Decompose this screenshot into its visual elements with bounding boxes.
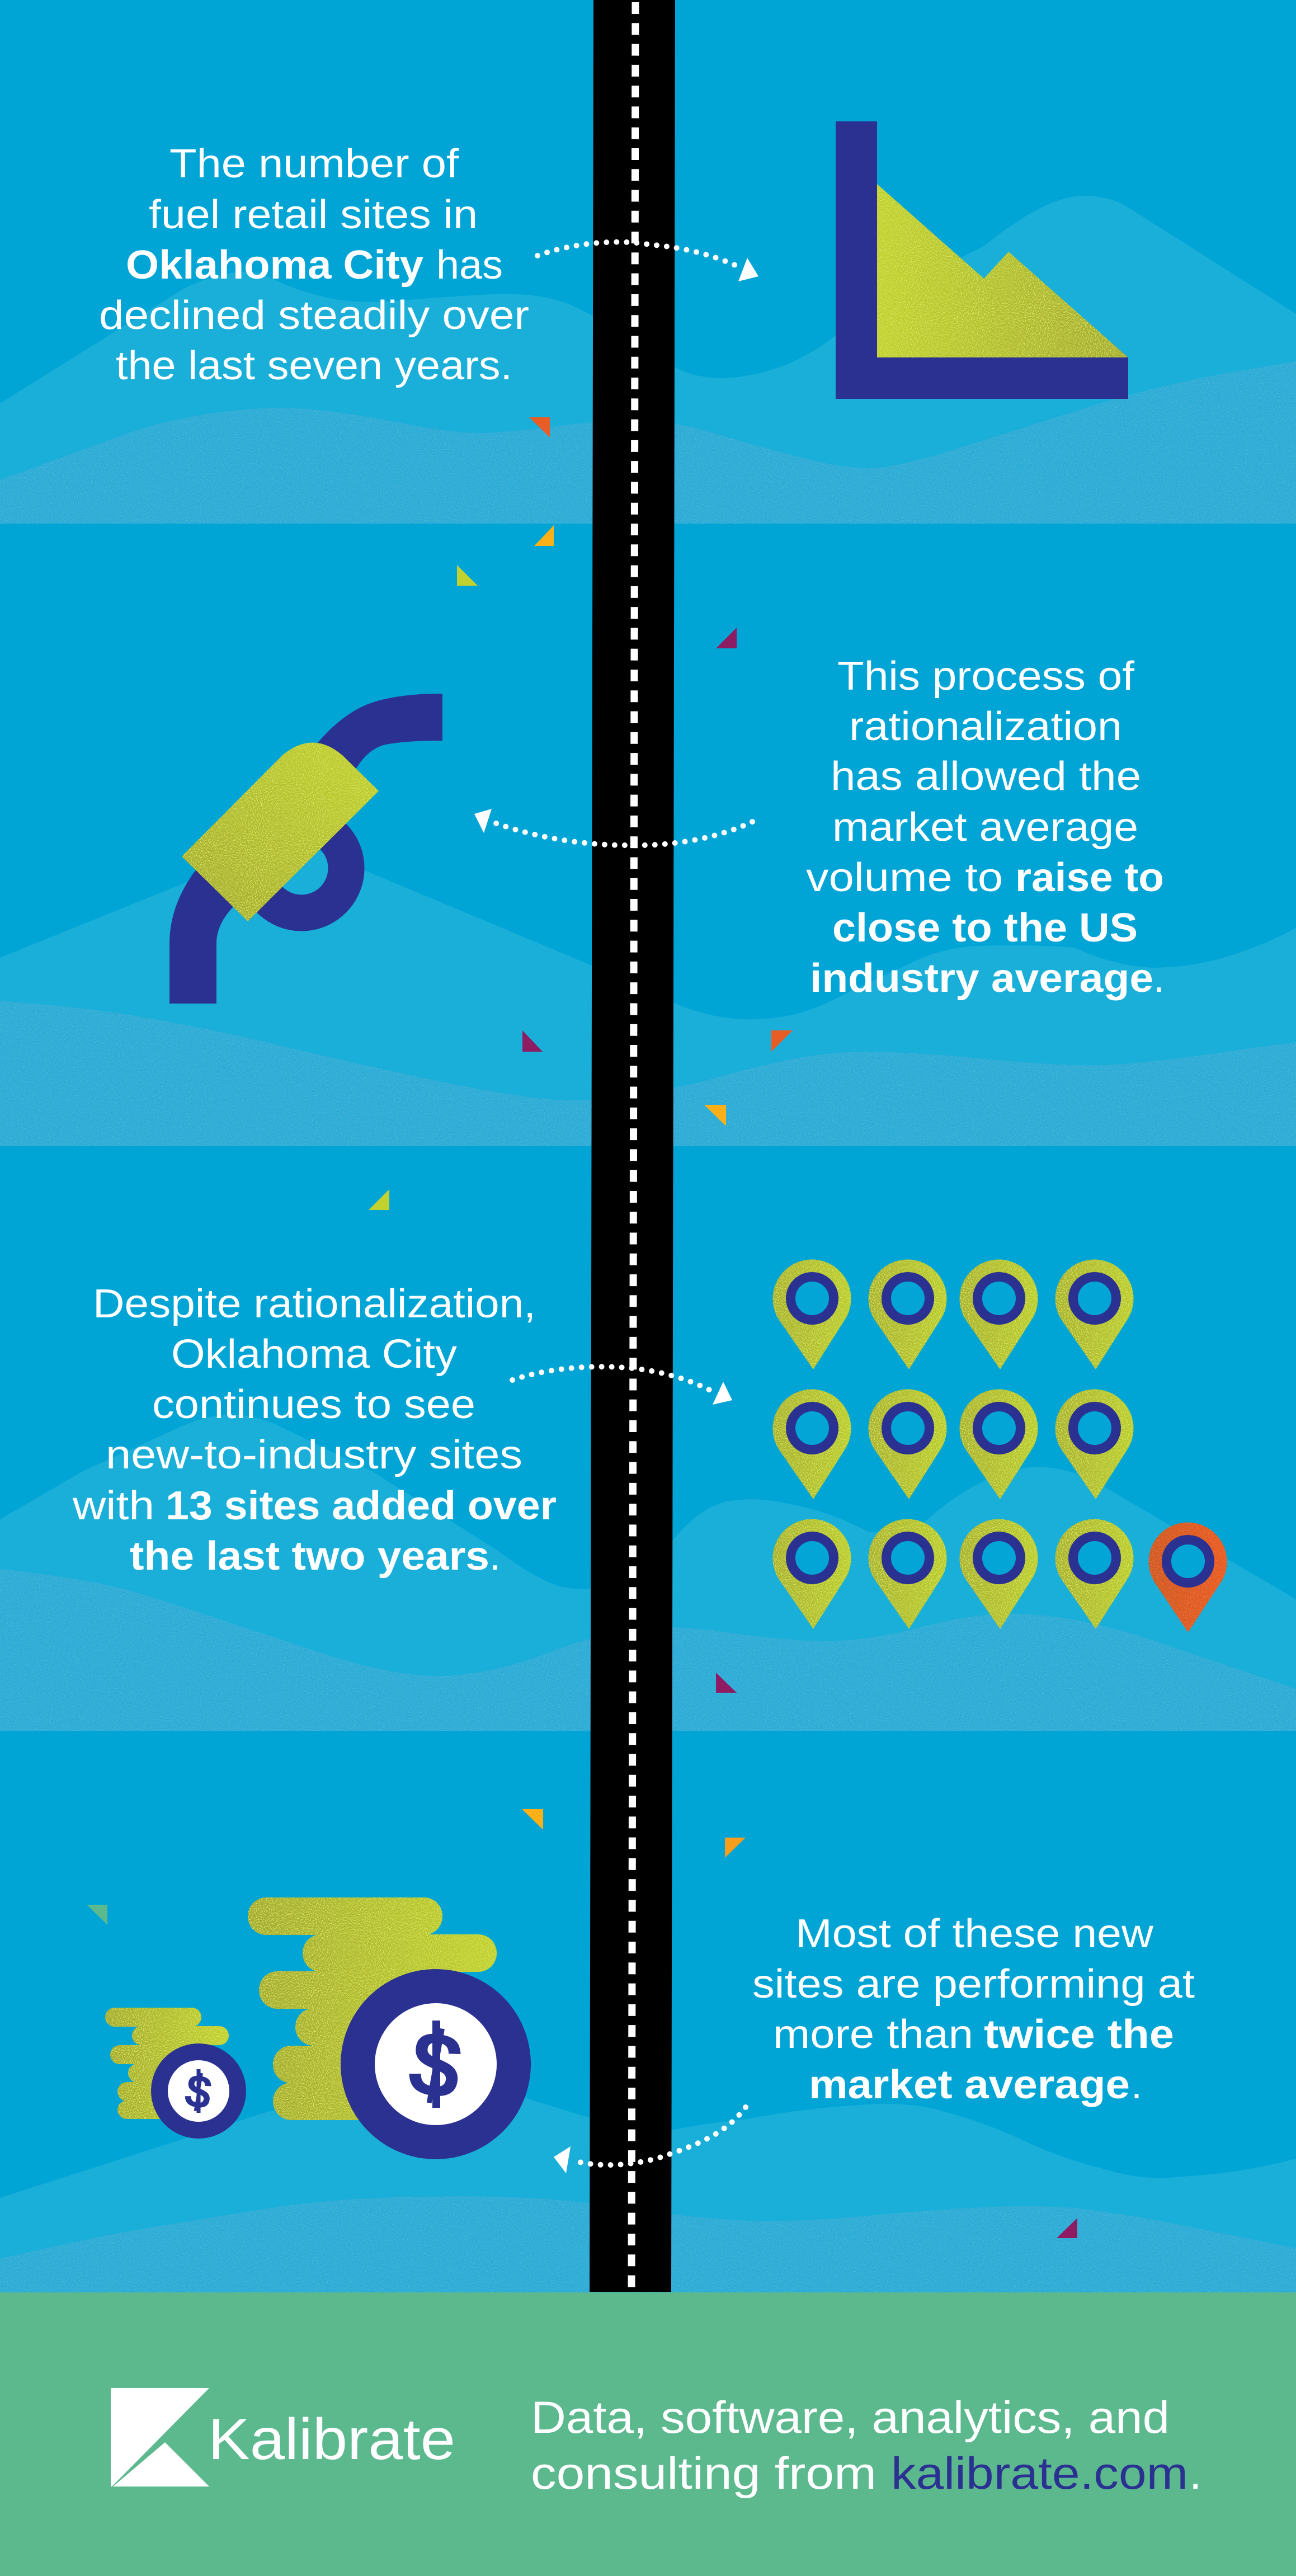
icon: declining chart (836, 121, 1128, 399)
triangle accent purple (716, 628, 737, 648)
text: performing at twice the market average: Most of these new (795, 1911, 1154, 1956)
text: rationalization raised volume: volume to (806, 855, 1003, 900)
panel: new-to-industry sites (72, 1189, 1227, 1693)
triangle accent orange (529, 417, 550, 437)
triangle accent amber (522, 1809, 543, 1830)
icon group: location pins (773, 1260, 1227, 1632)
panel: market average volume (169, 565, 1165, 1126)
text: 13 sites added: Oklahoma City (171, 1332, 457, 1377)
text: rationalization raised volume: . (1153, 956, 1165, 1001)
text: performing at twice the market average: . (1131, 2062, 1142, 2107)
text: 13 sites added: 13 sites added over (166, 1484, 557, 1528)
text: rationalization raised volume: has allowed the (831, 754, 1141, 799)
text: rationalization raised volume: This process of (837, 654, 1135, 699)
triangle accent orange (771, 1030, 793, 1052)
icon: large coin stack (248, 1897, 531, 2159)
logo: Kalibrate: Kalibrate (208, 2407, 455, 2472)
text: rationalization raised volume (806, 654, 1165, 1001)
road with dashed centre line (590, 0, 675, 2292)
icon: small coin stack: $ (181, 2064, 216, 2120)
logo: Kalibrate (111, 2388, 455, 2486)
text: number of sites declined: fuel retail sites in (149, 192, 478, 237)
text: tagline: consulting from (531, 2448, 876, 2499)
text: performing at twice the market average: market average (809, 2062, 1130, 2107)
text: tagline: kalibrate.com (891, 2448, 1188, 2499)
panel: declining site count (99, 121, 1128, 546)
arrow: text to chart (538, 242, 758, 281)
text: number of sites declined: the last seven years. (116, 343, 512, 388)
text: performing at twice the market average: twice the (984, 2012, 1174, 2057)
text: number of sites declined (99, 142, 529, 388)
text: 13 sites added (72, 1282, 557, 1579)
triangle accent amber (534, 525, 554, 546)
triangle accent purple (1057, 2218, 1077, 2238)
triangle accent orange-yellow (725, 1838, 746, 1858)
arrow: text to pins (512, 1367, 732, 1405)
panel: footer (0, 2292, 1296, 2576)
text: rationalization raised volume: close to the US (832, 906, 1138, 950)
text: number of sites declined: The number of (169, 142, 459, 186)
triangle accent amber (704, 1105, 726, 1126)
panel: performance of new sites (87, 1809, 1195, 2238)
text: rationalization raised volume: industry average (810, 956, 1153, 1001)
text: 13 sites added: new-to-industry sites (106, 1433, 522, 1477)
icon: fuel nozzle (169, 694, 442, 1004)
text: rationalization raised volume: market average (832, 805, 1138, 850)
text: 13 sites added: Despite rationalization, (93, 1282, 536, 1326)
text: number of sites declined: declined steadily over (99, 293, 529, 338)
icon: orange location pin (1149, 1523, 1227, 1632)
text: 13 sites added: continues to see (152, 1382, 475, 1427)
triangle accent lime (369, 1189, 389, 1210)
text: rationalization raised volume: raise to (1015, 855, 1164, 900)
icon: large coin stack: $ (402, 2009, 470, 2120)
text: 13 sites added: with (72, 1484, 154, 1528)
arrow: text to coins (554, 2107, 746, 2173)
triangle accent purple lower (522, 1030, 543, 1052)
arrow: text to nozzle (474, 809, 752, 845)
text: number of sites declined: Oklahoma City (126, 243, 423, 288)
text: 13 sites added: the last two years (130, 1534, 489, 1579)
icon: small coin stack (105, 2008, 246, 2139)
text: 13 sites added: . (489, 1534, 501, 1579)
text: tagline (531, 2393, 1202, 2499)
text: rationalization raised volume: rationalization (849, 704, 1122, 749)
triangle accent lime (457, 565, 478, 586)
text: performing at twice the market average: sites are performing at (752, 1962, 1195, 2007)
triangle accent green (87, 1905, 107, 1925)
text: performing at twice the market average (752, 1911, 1195, 2107)
text: tagline: . (1189, 2448, 1202, 2499)
text: number of sites declined: has (436, 243, 503, 288)
triangle accent purple (716, 1673, 737, 1693)
text: tagline: Data, software, analytics, and (531, 2393, 1170, 2443)
text: performing at twice the market average: more than (773, 2012, 973, 2057)
